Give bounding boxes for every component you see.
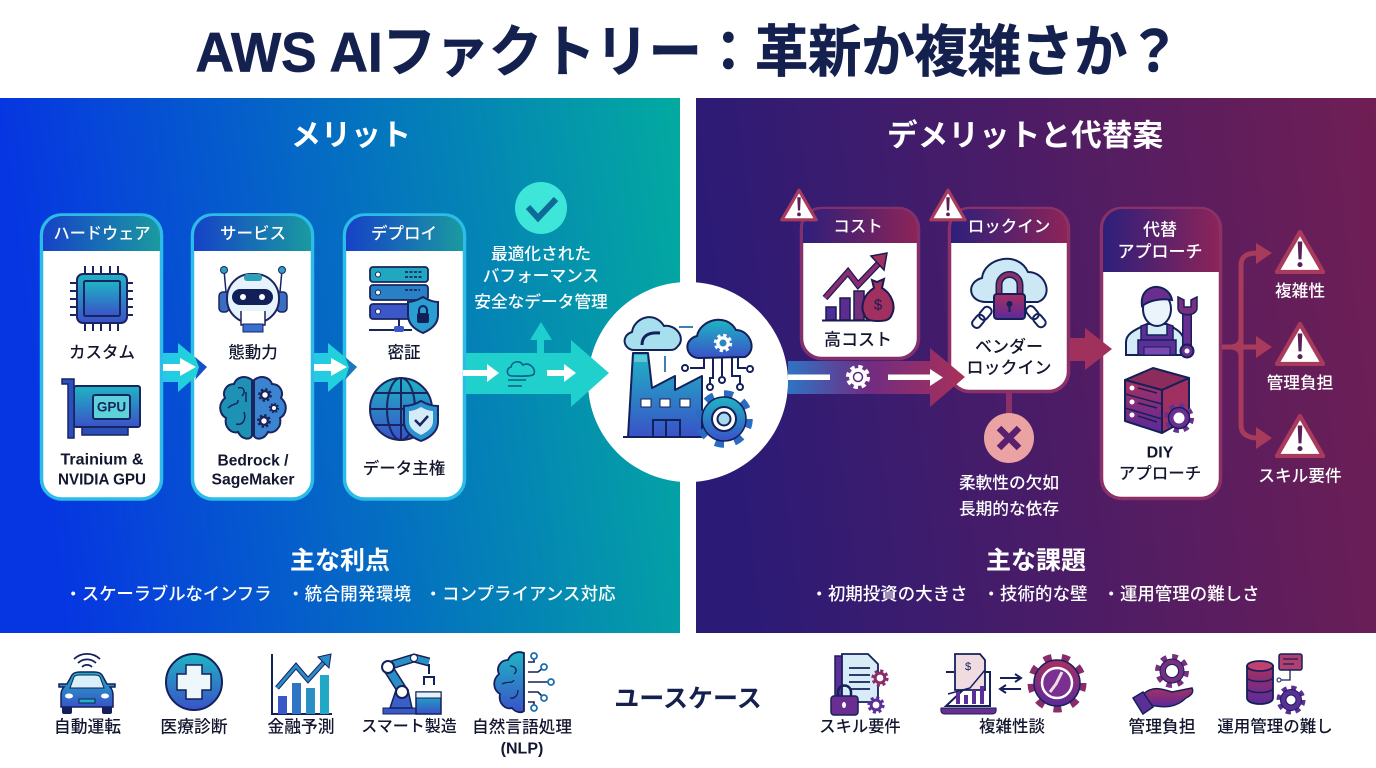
card: services: SageMaker <box>212 472 294 488</box>
icon: factory <box>623 317 753 444</box>
text block: lock-in issues: 柔軟性の欠如 <box>959 472 1059 492</box>
use case: skill requirements <box>819 654 901 736</box>
use case: autonomous driving: 自動運転 <box>54 718 121 736</box>
use case: natural language processing <box>472 652 572 758</box>
icon: server with shield <box>369 267 438 333</box>
icon: cloud lock with chains <box>970 259 1047 330</box>
text block: key challenges heading: 主な課題 <box>986 547 1086 575</box>
panel: merits <box>0 98 680 633</box>
icon: small cloud on arrow <box>507 362 534 386</box>
icon: warning cost <box>782 190 816 220</box>
use case: smart manufacturing <box>361 654 457 736</box>
text block: key benefits list: ・統合開発環境 <box>287 584 411 604</box>
icon: DIY server box with gear <box>1125 368 1191 433</box>
icon: laptop and arrows and gear: $ <box>965 661 971 673</box>
icon: laptop and arrows and gear <box>941 654 1083 714</box>
use case: management burden <box>1128 657 1196 736</box>
use case: complexity: 複雑性談 <box>979 717 1046 736</box>
text block: key challenges list: ・技術的な壁 <box>982 584 1088 604</box>
arrow: hardware to services <box>163 343 207 392</box>
text block: key challenges list: ・運用管理の難しさ <box>1102 584 1260 604</box>
card: services <box>192 215 312 499</box>
card: alternative approach: アプローチ <box>1119 464 1201 483</box>
risk: management burden: 管理負担 <box>1267 374 1333 392</box>
icon: cpu chip <box>70 266 133 331</box>
arrow: up to outcomes <box>530 322 552 356</box>
icon: medical cross <box>166 654 222 710</box>
title: AWS AIファクトリー：革新か複雑さか？ <box>196 20 1180 84</box>
card: cost: コスト <box>833 218 883 236</box>
use case heading: ユースケース <box>614 685 762 713</box>
connector: lock-in down to issue <box>1006 392 1012 422</box>
arrow: factory to cost <box>788 348 965 407</box>
arrow: deploy to factory <box>463 340 609 407</box>
use case: natural language processing: 自然言語処理 <box>472 716 572 736</box>
use case: medical diagnosis <box>160 654 228 736</box>
icon: warning lock-in <box>931 190 965 220</box>
center circle: AI factory <box>588 282 788 482</box>
card: deploy: データ主権 <box>363 458 445 478</box>
text block: key benefits heading: 主な利点 <box>290 547 390 575</box>
card: alternative approach <box>1102 208 1220 498</box>
icon: cross badge <box>984 413 1034 463</box>
card: hardware: Trainium & <box>60 452 144 468</box>
use case: natural language processing: (NLP) <box>501 740 543 758</box>
risk: skill requirements: スキル要件 <box>1258 466 1342 486</box>
use case: management burden: 管理負担 <box>1128 718 1196 736</box>
use case: financial forecasting <box>267 654 335 736</box>
card: lock-in: ロックイン <box>966 358 1052 378</box>
card: services: Bedrock / <box>218 452 289 470</box>
icon: robot <box>219 266 287 332</box>
card: lock-in: ベンダー <box>975 336 1043 356</box>
icon: small gear on arrow <box>848 367 868 387</box>
arrow: lock-in to alternative <box>1070 328 1112 370</box>
text block: key benefits list: ・スケーラブルなインフラ <box>64 584 272 604</box>
use case: financial forecasting: 金融予測 <box>267 718 335 736</box>
icon: growth chart <box>272 654 332 714</box>
card: deploy <box>344 215 464 499</box>
icon: car <box>59 654 115 714</box>
icon: database with gear <box>1247 654 1303 712</box>
card: hardware: NVIDIA GPU <box>58 472 146 488</box>
text block: lock-in issues <box>959 472 1059 518</box>
icon: brain with gears <box>220 377 286 439</box>
icon: document with lock and gears <box>831 654 887 715</box>
use case: medical diagnosis: 医療診断 <box>160 718 228 736</box>
icon: rising cost chart with money bag <box>822 253 894 321</box>
text block: key benefits list <box>64 584 616 604</box>
use case: operations difficulty: 運用管理の難し <box>1217 717 1333 736</box>
risk: skill requirements <box>1258 416 1342 486</box>
card: hardware: カスタム <box>69 343 135 362</box>
risk: complexity <box>1275 232 1325 300</box>
card: services: 態動力 <box>228 343 278 362</box>
text block: outcomes <box>474 244 608 312</box>
text block: outcomes: 安全なデータ管理 <box>474 292 608 312</box>
card: hardware <box>42 215 162 499</box>
card: cost: 高コスト <box>824 330 892 350</box>
heading: demerits: デメリットと代替案 <box>887 118 1163 153</box>
use case: complexity <box>941 654 1083 736</box>
card: alternative approach: DIY <box>1147 444 1174 462</box>
card: alternative approach: アプローチ <box>1118 242 1202 262</box>
arrow: services to deploy <box>314 343 357 392</box>
arrow: branches to risks <box>1222 243 1272 449</box>
icon: gpu card: GPU <box>97 400 126 414</box>
use case: operations difficulty <box>1217 654 1333 736</box>
card: deploy: 密証 <box>388 343 420 362</box>
icon: worker with wrench <box>1126 287 1197 358</box>
text block: outcomes: バフォーマンス <box>483 266 599 286</box>
icon: rising cost chart with money bag: $ <box>874 296 883 314</box>
card: lock-in <box>950 208 1068 392</box>
use case: smart manufacturing: スマート製造 <box>361 718 457 736</box>
card: cost <box>802 208 918 358</box>
icon: hand holding gear <box>1133 657 1193 714</box>
icon: check badge <box>515 182 567 234</box>
icon: half brain circuit <box>494 652 554 712</box>
text block: key benefits list: ・コンプライアンス対応 <box>424 584 616 604</box>
heading: merits: メリット <box>291 120 411 152</box>
card: hardware: ハードウェア <box>53 225 151 243</box>
card: services: サービス <box>220 224 286 243</box>
risk: complexity: 複雑性 <box>1275 282 1325 300</box>
text block: key challenges list: ・初期投資の大きさ <box>810 584 968 604</box>
use case: skill requirements: スキル要件 <box>819 718 901 736</box>
text block: outcomes: 最適化された <box>491 244 591 264</box>
icon: robot arm <box>382 654 441 714</box>
card: lock-in: ロックイン <box>968 217 1050 236</box>
text block: lock-in issues: 長期的な依存 <box>959 500 1059 518</box>
card: deploy: デプロイ <box>371 223 437 243</box>
panel: demerits and alternatives <box>696 98 1376 633</box>
icon: gpu card <box>62 379 140 438</box>
icon: globe with shield <box>370 378 438 441</box>
risk: management burden <box>1267 324 1333 392</box>
card: alternative approach: 代替 <box>1143 220 1177 240</box>
text block: key challenges list <box>810 584 1260 604</box>
use case: autonomous driving <box>54 654 121 736</box>
